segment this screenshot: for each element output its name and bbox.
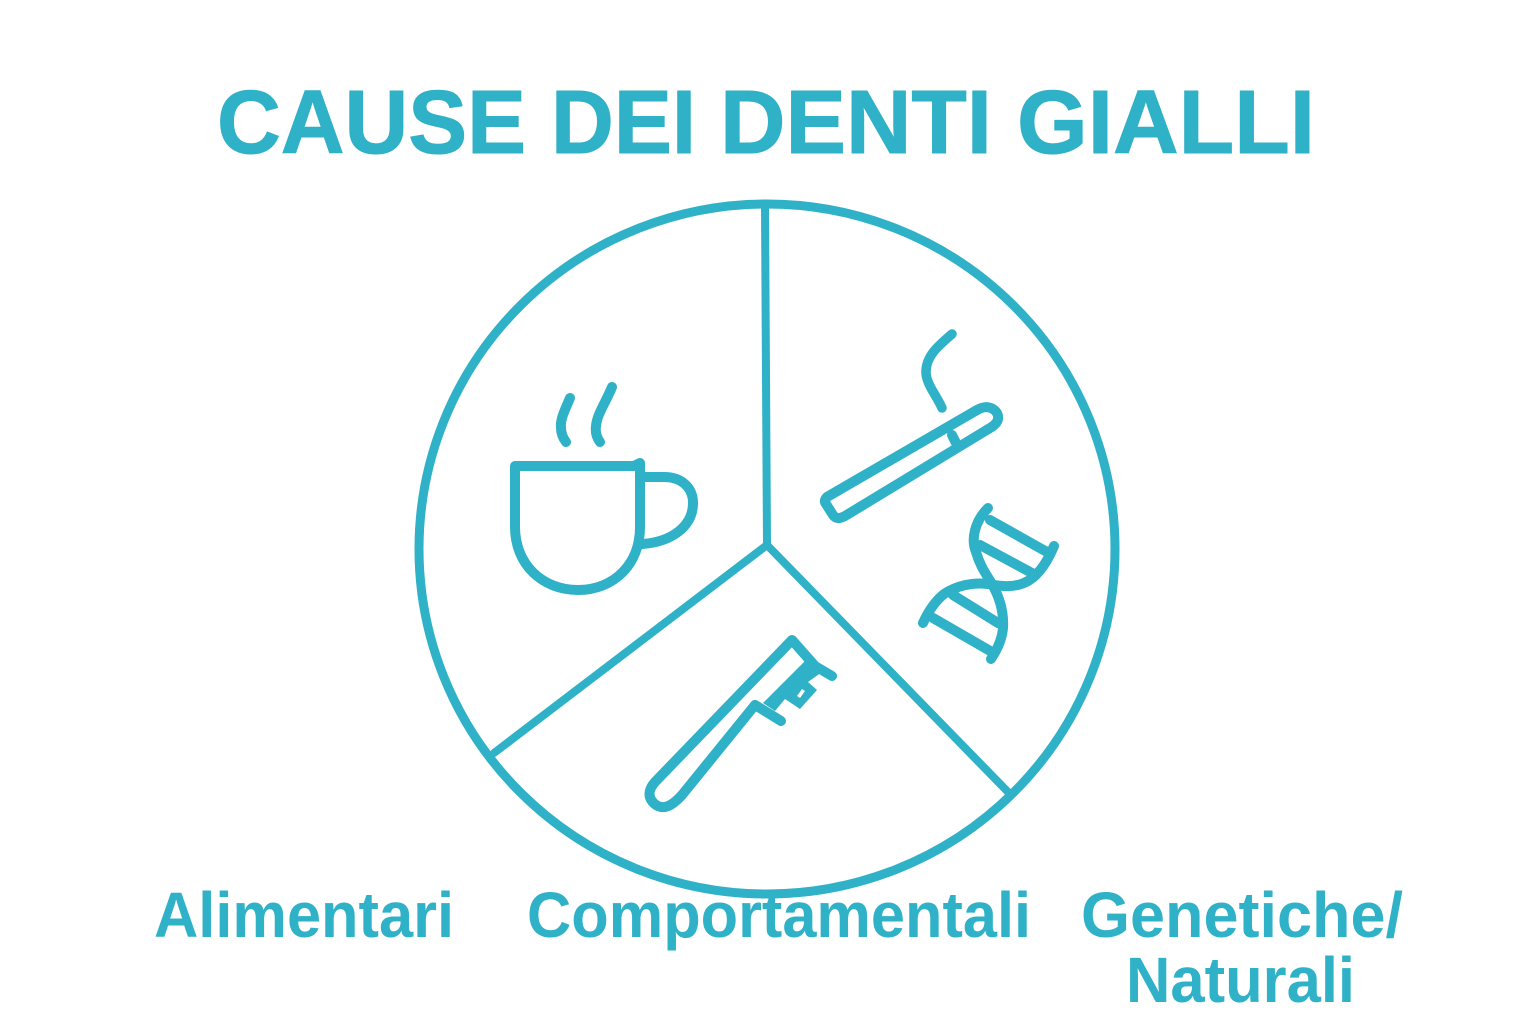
pie chart bbox=[419, 204, 1115, 894]
label: Genetiche/Naturali bbox=[1081, 879, 1403, 1016]
label: Alimentari: Alimentari bbox=[154, 879, 454, 951]
pie outline bbox=[419, 204, 1115, 894]
title: CAUSE bbox=[217, 73, 526, 173]
title: DENTI bbox=[720, 73, 992, 173]
title: GIALLI bbox=[1017, 73, 1315, 173]
title: DEI bbox=[551, 73, 696, 173]
label: Genetiche/Naturali: Naturali bbox=[1126, 944, 1355, 1016]
icon: coffee cup bbox=[515, 387, 693, 590]
toothbrush head bbox=[763, 660, 822, 711]
pie dividers bbox=[494, 208, 1008, 792]
icon: toothbrush bbox=[649, 640, 832, 807]
icon: DNA bbox=[923, 508, 1054, 659]
icon: cigarette bbox=[825, 334, 998, 518]
label: Genetiche/Naturali: Genetiche/ bbox=[1081, 879, 1403, 951]
label: Comportamentali: Comportamentali bbox=[527, 879, 1031, 951]
title bbox=[217, 73, 1315, 173]
